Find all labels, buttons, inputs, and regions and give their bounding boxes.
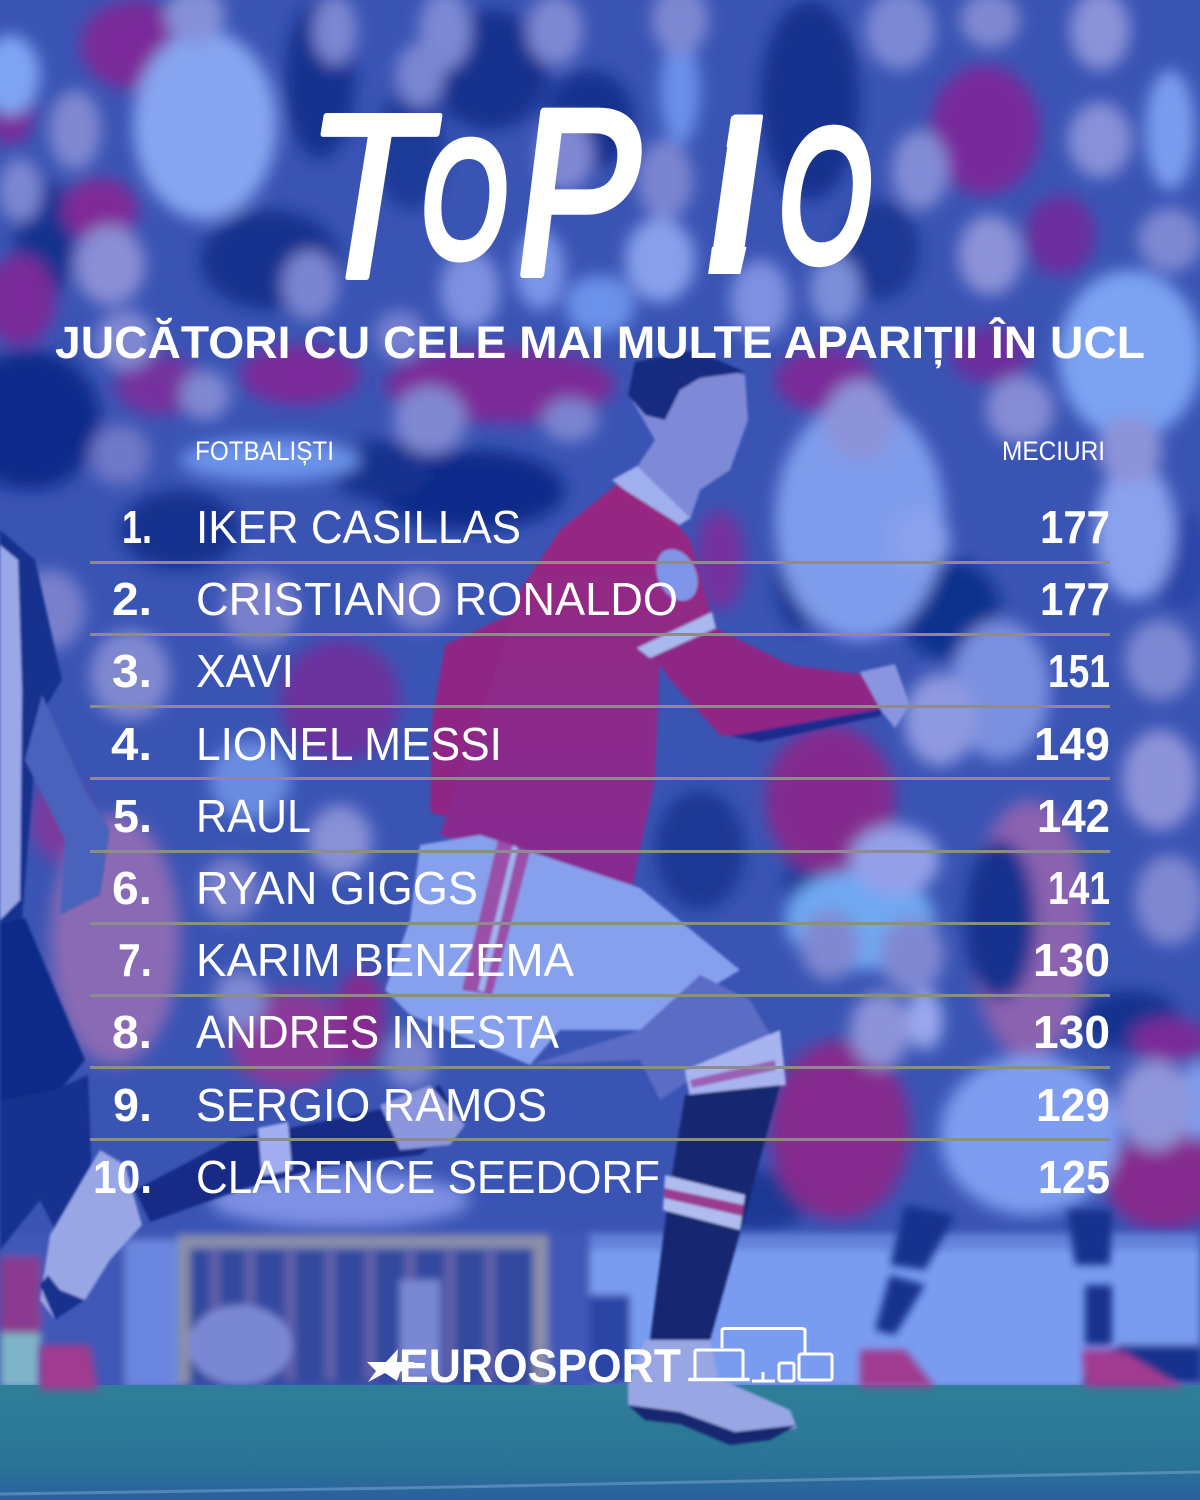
row 10: CLARENCE SEEDORF <box>196 1151 660 1203</box>
row dividers <box>90 561 1110 1141</box>
head and neck <box>632 360 748 520</box>
row 9: SERGIO RAMOS <box>196 1079 547 1131</box>
row 1 <box>122 501 1110 553</box>
light shirts <box>133 30 277 220</box>
row 7: KARIM BENZEMA <box>196 934 574 986</box>
icon: star <box>367 1349 415 1382</box>
row 1: IKER CASILLAS <box>196 501 521 553</box>
row 2: 2. <box>112 573 152 625</box>
row 10 <box>93 1151 1110 1203</box>
row 6: 141 <box>1048 862 1110 914</box>
subtitle heading: JUCĂTORI CU CELE MAI MULTE APARIȚII ÎN UCL <box>55 317 1145 368</box>
row 3: 3. <box>112 645 152 697</box>
row 8: 8. <box>112 1006 152 1058</box>
row 3: XAVI <box>196 645 294 697</box>
icon: devices <box>689 1328 832 1381</box>
shirt <box>440 470 712 888</box>
title: TOP 10: T <box>288 65 452 327</box>
front leg <box>530 975 785 1100</box>
dark gaps <box>285 0 355 160</box>
row 8: ANDRES INIESTA <box>196 1006 559 1058</box>
row 6: RYAN GIGGS <box>196 862 478 914</box>
title: TOP 10: O <box>770 92 883 300</box>
title: TOP 10 <box>320 108 872 280</box>
title: TOP 10: O <box>415 108 516 291</box>
column header: matches: MECIURI <box>1002 436 1105 466</box>
logo: Eurosport <box>367 1339 681 1392</box>
row 3: 151 <box>1048 645 1110 697</box>
column header: players: FOTBALIȘTI <box>195 436 334 466</box>
ranking table <box>93 501 1110 1203</box>
back leg <box>135 1085 460 1222</box>
back boot <box>40 1150 142 1320</box>
wordmark: EUROSPORT <box>399 1339 681 1392</box>
title: TOP 10: 1 <box>657 67 806 320</box>
player: Cristiano Ronaldo <box>40 350 910 1445</box>
row 2 <box>112 573 1110 625</box>
row 4 <box>111 718 1110 770</box>
row 1: 1. <box>122 501 152 553</box>
row 8: 130 <box>1033 1006 1110 1058</box>
row 5 <box>113 790 1110 842</box>
player: opponent in striped kit <box>0 530 110 1250</box>
row 5: 142 <box>1037 790 1110 842</box>
right arm <box>650 625 885 740</box>
title: TOP 10: P <box>502 62 660 325</box>
row 2: CRISTIANO RONALDO <box>196 573 678 625</box>
row 9: 9. <box>113 1079 152 1131</box>
front boot <box>628 1340 797 1440</box>
crest badge <box>648 542 706 608</box>
faces <box>165 0 225 43</box>
row 9: 129 <box>1036 1079 1110 1131</box>
row 10: 125 <box>1038 1151 1110 1203</box>
hand <box>860 664 910 728</box>
row 4: 4. <box>111 718 152 770</box>
row 5: RAUL <box>196 790 311 842</box>
row 7 <box>118 934 1110 986</box>
background: right-side blurred player legs <box>40 1205 1185 1390</box>
row 2: 177 <box>1040 573 1110 625</box>
row 4: LIONEL MESSI <box>196 718 502 770</box>
row 10: 10. <box>93 1151 152 1203</box>
row 7: 7. <box>118 934 152 986</box>
row 6 <box>112 862 1110 914</box>
purple-red shirts <box>80 0 190 90</box>
row 1: 177 <box>1040 501 1110 553</box>
shorts <box>385 835 740 1065</box>
row 3 <box>112 645 1110 697</box>
row 7: 130 <box>1033 934 1110 986</box>
row 4: 149 <box>1034 718 1110 770</box>
row 9 <box>113 1079 1110 1131</box>
left sleeve <box>430 612 520 825</box>
orange vests <box>970 800 1090 1060</box>
row 6: 6. <box>112 862 152 914</box>
row 5: 5. <box>113 790 152 842</box>
row 8 <box>112 1006 1110 1058</box>
background: pitch-side boards and grass <box>0 1232 1200 1500</box>
